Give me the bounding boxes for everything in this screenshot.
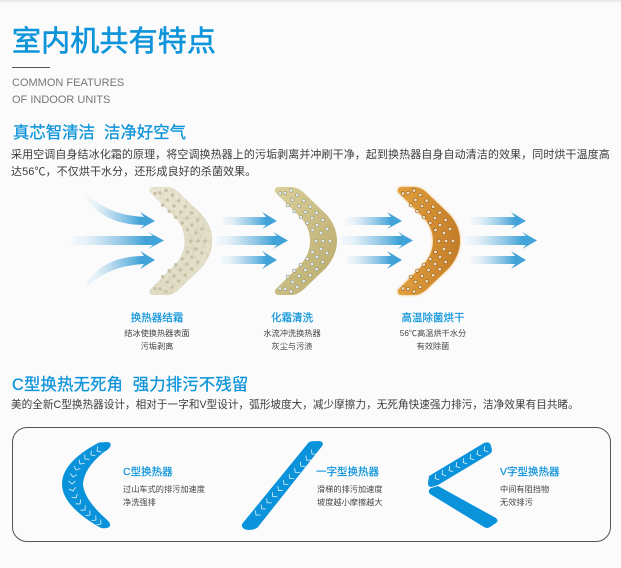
step 3 description: [400, 329, 466, 351]
panel: heat exchanger comparison: [12, 427, 611, 542]
section body text: self-cleaning: [11, 148, 610, 178]
C-type description: 净洗强排: [123, 498, 156, 507]
V-type description: 中间有阻挡物: [500, 485, 549, 494]
top edge shadow: [0, 0, 621, 3]
step 3 description: 56℃高温烘干水分: [400, 329, 466, 338]
english subtitle: COMMON FEATURES: [12, 77, 124, 89]
title: 室内机共有特点: [12, 26, 216, 58]
english subtitle: OF INDOOR UNITS: [12, 94, 110, 106]
icon: C-type exchanger: [62, 442, 111, 528]
V-type description: [500, 485, 549, 507]
english subtitle: [12, 77, 124, 106]
step 1 caption: 换热器结霜: [131, 312, 183, 324]
straight-type label: 一字型换热器: [316, 466, 379, 478]
section body text: self-cleaning: 达56℃，不仅烘干水分，还形成良好的杀菌效果。: [11, 166, 256, 178]
straight-type description: 滑梯的排污加速度: [317, 485, 383, 494]
section body text: C-type: 美的全新C型换热器设计，相对于一字和V型设计，弧形坡度大，减少摩擦力，无死角快速强力排污，洁净效果有目共睹。: [11, 399, 579, 411]
step 2 description: 灰尘与污渍: [272, 342, 312, 351]
section body text: self-cleaning: 采用空调自身结冰化霜的原理，将空调换热器上的污垢剥离并冲刷干净，起到换热器自身自动清洁的效果，同时烘干温度高: [11, 149, 610, 161]
C-type description: [123, 485, 205, 507]
straight-type description: [317, 485, 383, 507]
step 1 description: [124, 329, 190, 351]
section heading: C-type: C型换热无死角 强力排污不残留: [12, 376, 248, 394]
heat exchanger: washed: [275, 187, 337, 295]
icon: V-type exchanger: [428, 442, 498, 528]
arrows: outgoing air: [464, 212, 537, 269]
V-type description: 无效排污: [500, 498, 533, 507]
V-type label: V字型换热器: [500, 466, 560, 478]
C-type label: C型换热器: [123, 466, 173, 478]
heat exchanger: frosted: [150, 187, 212, 295]
title underline: [12, 67, 50, 68]
arrows: after washing: [340, 212, 413, 269]
arrows: after frosting: [215, 212, 288, 269]
C-type description: 过山车式的排污加速度: [123, 485, 205, 494]
icon: straight-type exchanger: [242, 441, 323, 530]
straight-type description: 坡度越小摩擦越大: [317, 498, 383, 507]
step 1 description: 污垢剥离: [141, 342, 173, 351]
step 1 description: 结冰使换热器表面: [124, 329, 190, 338]
section heading: self-cleaning: 真芯智清洁 洁净好空气: [13, 124, 186, 142]
step 2 caption: 化霜清洗: [271, 312, 313, 324]
heat exchanger: heated: [398, 187, 460, 295]
arrows: incoming air, curved: [70, 190, 164, 291]
step 3 caption: 高温除菌烘干: [402, 312, 464, 324]
step 3 description: 有效除菌: [417, 342, 449, 351]
step 2 description: 水流冲洗换热器: [263, 329, 321, 338]
step 2 description: [263, 329, 321, 351]
